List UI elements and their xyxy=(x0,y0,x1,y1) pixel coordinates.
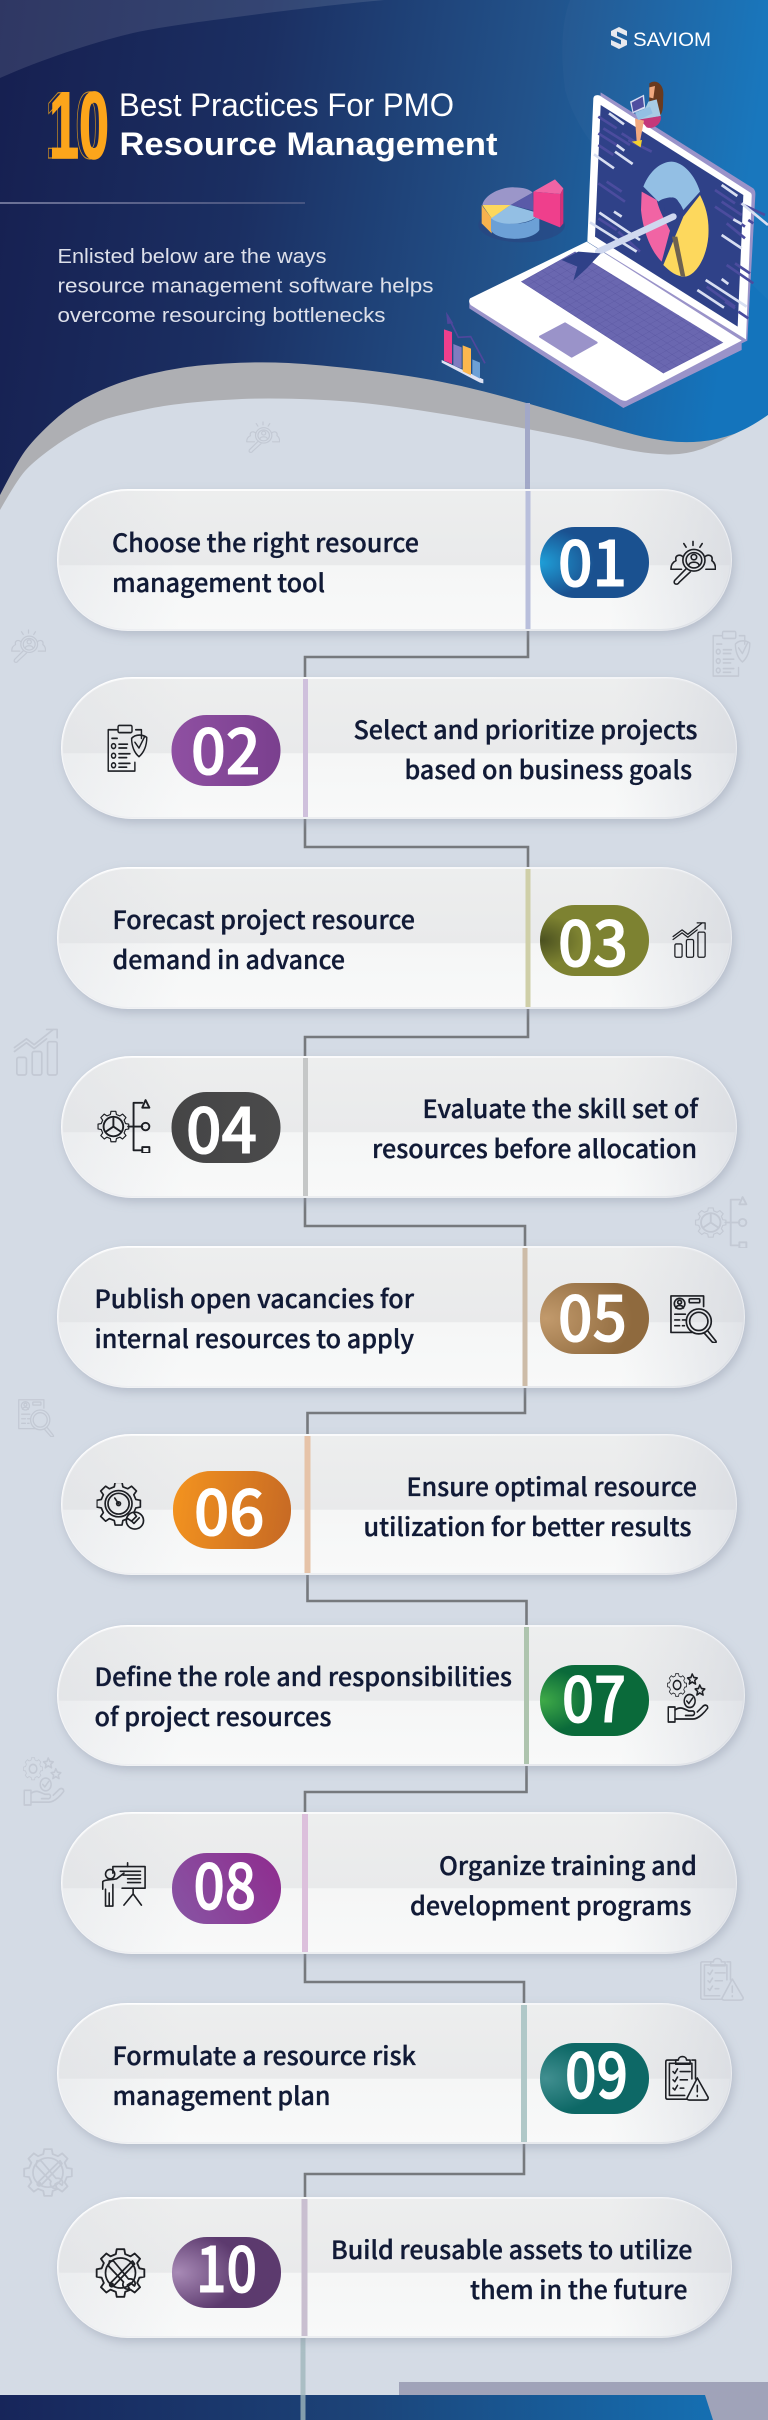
text: Publish open vacancies for xyxy=(94,1280,415,1316)
text xyxy=(354,711,698,787)
text: resources before allocation xyxy=(372,1130,697,1166)
text: management plan xyxy=(112,2077,330,2113)
panel: step 10 xyxy=(58,2198,731,2337)
number badge: 06 xyxy=(194,1462,264,1554)
text xyxy=(112,524,419,600)
icon: gear gauge xyxy=(97,1482,144,1529)
number badge xyxy=(172,2219,281,2311)
timeline band xyxy=(303,679,308,817)
header banner xyxy=(0,0,768,520)
text: Evaluate the skill set of xyxy=(422,1090,699,1126)
panel: step 05 xyxy=(58,1247,744,1387)
gray wave xyxy=(0,362,768,520)
screen code lines xyxy=(590,113,768,318)
illustration: laptop with charts xyxy=(442,82,768,408)
footer block xyxy=(0,2382,768,2420)
timeline band xyxy=(522,1248,528,1386)
screen pie chart xyxy=(641,162,709,277)
text: internal resources to apply xyxy=(94,1320,414,1356)
title xyxy=(45,73,498,179)
number badge xyxy=(540,1268,649,1360)
step connectors xyxy=(305,628,528,2200)
text xyxy=(112,2037,417,2113)
panel: step 04 xyxy=(62,1057,736,1197)
panel: step 02 xyxy=(62,678,736,818)
intro text: overcome resourcing bottlenecks xyxy=(58,304,386,327)
connector line from step 10 to footer xyxy=(300,2337,306,2420)
text xyxy=(94,1280,415,1356)
text: Ensure optimal resource xyxy=(406,1468,697,1504)
text: management tool xyxy=(112,564,325,600)
keyboard xyxy=(521,252,723,373)
text xyxy=(364,1468,697,1544)
panel: step 06 xyxy=(62,1435,736,1574)
timeline band xyxy=(526,491,530,629)
logo: Saviom: SAVIOM xyxy=(633,30,711,51)
number badge: 07 xyxy=(562,1649,626,1741)
icon: presenter at board xyxy=(103,1863,145,1906)
faded background icons xyxy=(12,422,750,2196)
number badge: 01 xyxy=(558,513,627,605)
connector line from header to step 1 xyxy=(525,403,530,493)
pointer arrow xyxy=(562,217,673,281)
number badge: 03 xyxy=(558,893,628,985)
timeline band xyxy=(526,869,530,1007)
panel: step 01 xyxy=(58,490,731,630)
icon: growth chart xyxy=(673,923,705,957)
icon: checklist xyxy=(108,725,147,771)
text xyxy=(331,2231,692,2307)
text: Organize training and xyxy=(439,1847,697,1883)
panel: step 08 xyxy=(62,1813,736,1953)
title line 1: Best Practices For PMO xyxy=(119,87,454,123)
number badge xyxy=(540,1649,649,1741)
icon: checklist warning xyxy=(666,2057,708,2100)
text xyxy=(372,1090,699,1166)
intro text xyxy=(58,245,434,327)
timeline band xyxy=(524,1627,529,1764)
icon: search people xyxy=(671,541,716,584)
big orange 10: 10 xyxy=(45,73,105,179)
text: development programs xyxy=(410,1887,692,1923)
text: Define the role and responsibilities xyxy=(94,1658,512,1694)
title divider xyxy=(0,202,305,204)
text xyxy=(112,901,415,977)
text: Build reusable assets to utilize xyxy=(331,2231,692,2267)
icon: hand with gear and stars xyxy=(668,1674,708,1722)
number badge: 09 xyxy=(565,2025,628,2117)
text: demand in advance xyxy=(112,941,345,977)
timeline band xyxy=(304,1436,310,1573)
3D pie chart xyxy=(478,179,565,242)
text: of project resources xyxy=(94,1698,332,1734)
girl with laptop xyxy=(630,82,663,147)
number badge xyxy=(540,513,649,605)
text: based on business goals xyxy=(404,751,692,787)
title line 2: Resource Management xyxy=(120,126,498,162)
text xyxy=(94,1658,512,1734)
number badge xyxy=(540,893,649,985)
number badge: 08 xyxy=(194,1836,256,1928)
touchpad xyxy=(540,323,597,357)
text: utilization for better results xyxy=(364,1508,692,1544)
logo: Saviom xyxy=(611,27,711,51)
number badge: 04 xyxy=(186,1080,257,1172)
intro text: Enlisted below are the ways xyxy=(58,245,326,268)
light page curve xyxy=(0,398,768,520)
icon: resume search xyxy=(671,1296,716,1343)
timeline band xyxy=(302,2199,308,2336)
small bar chart xyxy=(442,312,485,383)
text: them in the future xyxy=(470,2271,688,2307)
number badge: 05 xyxy=(558,1268,627,1360)
laptop base xyxy=(469,242,742,408)
number badge xyxy=(173,1462,291,1554)
text: Select and prioritize projects xyxy=(354,711,698,747)
timeline band xyxy=(303,1058,308,1196)
number badge xyxy=(172,701,280,793)
panel: step 03 xyxy=(58,868,731,1008)
panel: step 07 xyxy=(58,1626,744,1765)
big orange 10 xyxy=(45,73,109,179)
text: Forecast project resource xyxy=(112,901,415,937)
icon: gear with tools xyxy=(97,2249,144,2297)
number badge xyxy=(172,1836,281,1928)
number badge xyxy=(172,1080,280,1172)
number badge: 10 xyxy=(196,2219,257,2311)
timeline band xyxy=(521,2005,527,2142)
number badge xyxy=(540,2025,649,2117)
text xyxy=(410,1847,697,1923)
top corner swoosh xyxy=(0,0,385,78)
timeline band xyxy=(302,1814,308,1952)
text: Formulate a resource risk xyxy=(112,2037,417,2073)
text: Choose the right resource xyxy=(112,524,419,560)
top right highlight xyxy=(562,0,768,300)
big orange 10: 10 xyxy=(49,73,109,179)
intro text: resource management software helps xyxy=(58,274,434,298)
number badge: 02 xyxy=(191,701,260,793)
icon: gear hierarchy xyxy=(98,1100,149,1153)
laptop lid xyxy=(587,92,755,343)
panel: step 09 xyxy=(58,2004,731,2143)
